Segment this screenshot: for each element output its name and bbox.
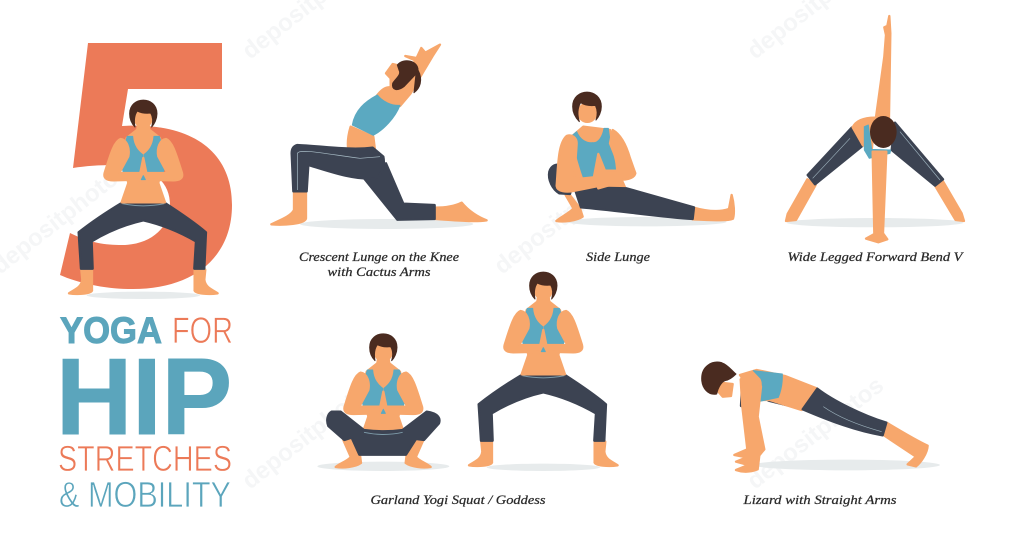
big number 5 — [60, 43, 232, 289]
caption: side lunge: Side Lunge — [586, 249, 650, 264]
caption: lizard with straight arms: Lizard with Straight Arms — [742, 492, 896, 507]
caption: wide legged forward bend: Wide Legged Forward Bend V — [788, 249, 965, 264]
figure: crescent lunge with cactus arms — [271, 45, 487, 229]
figure: lizard with straight arms — [702, 362, 940, 472]
title: yoga for: YOGA — [60, 310, 162, 351]
watermark: depositphotos — [489, 157, 636, 280]
title: hip: HIP — [56, 336, 232, 458]
caption: crescent lunge: with Cactus Arms — [328, 264, 430, 279]
watermark — [0, 0, 889, 495]
watermark: depositphotos — [742, 372, 889, 495]
figure: wide legged forward bend V — [786, 16, 964, 242]
caption: crescent lunge — [299, 249, 459, 279]
title: yoga for — [60, 310, 233, 351]
title: stretches: STRETCHES — [58, 438, 232, 479]
title: yoga for: FOR — [172, 310, 233, 351]
watermark: depositphotos — [237, 372, 384, 495]
caption: garland squat and goddess: Garland Yogi Squat / Goddess — [370, 492, 546, 507]
figure: goddess pose — [469, 272, 618, 471]
caption: crescent lunge: Crescent Lunge on the Knee — [299, 249, 459, 264]
title: and mobility: & MOBILITY — [59, 474, 231, 515]
figure: goddess pose on the number 5 — [69, 100, 218, 299]
figure: side lunge — [549, 92, 734, 226]
figure: garland yogi squat — [317, 334, 449, 471]
